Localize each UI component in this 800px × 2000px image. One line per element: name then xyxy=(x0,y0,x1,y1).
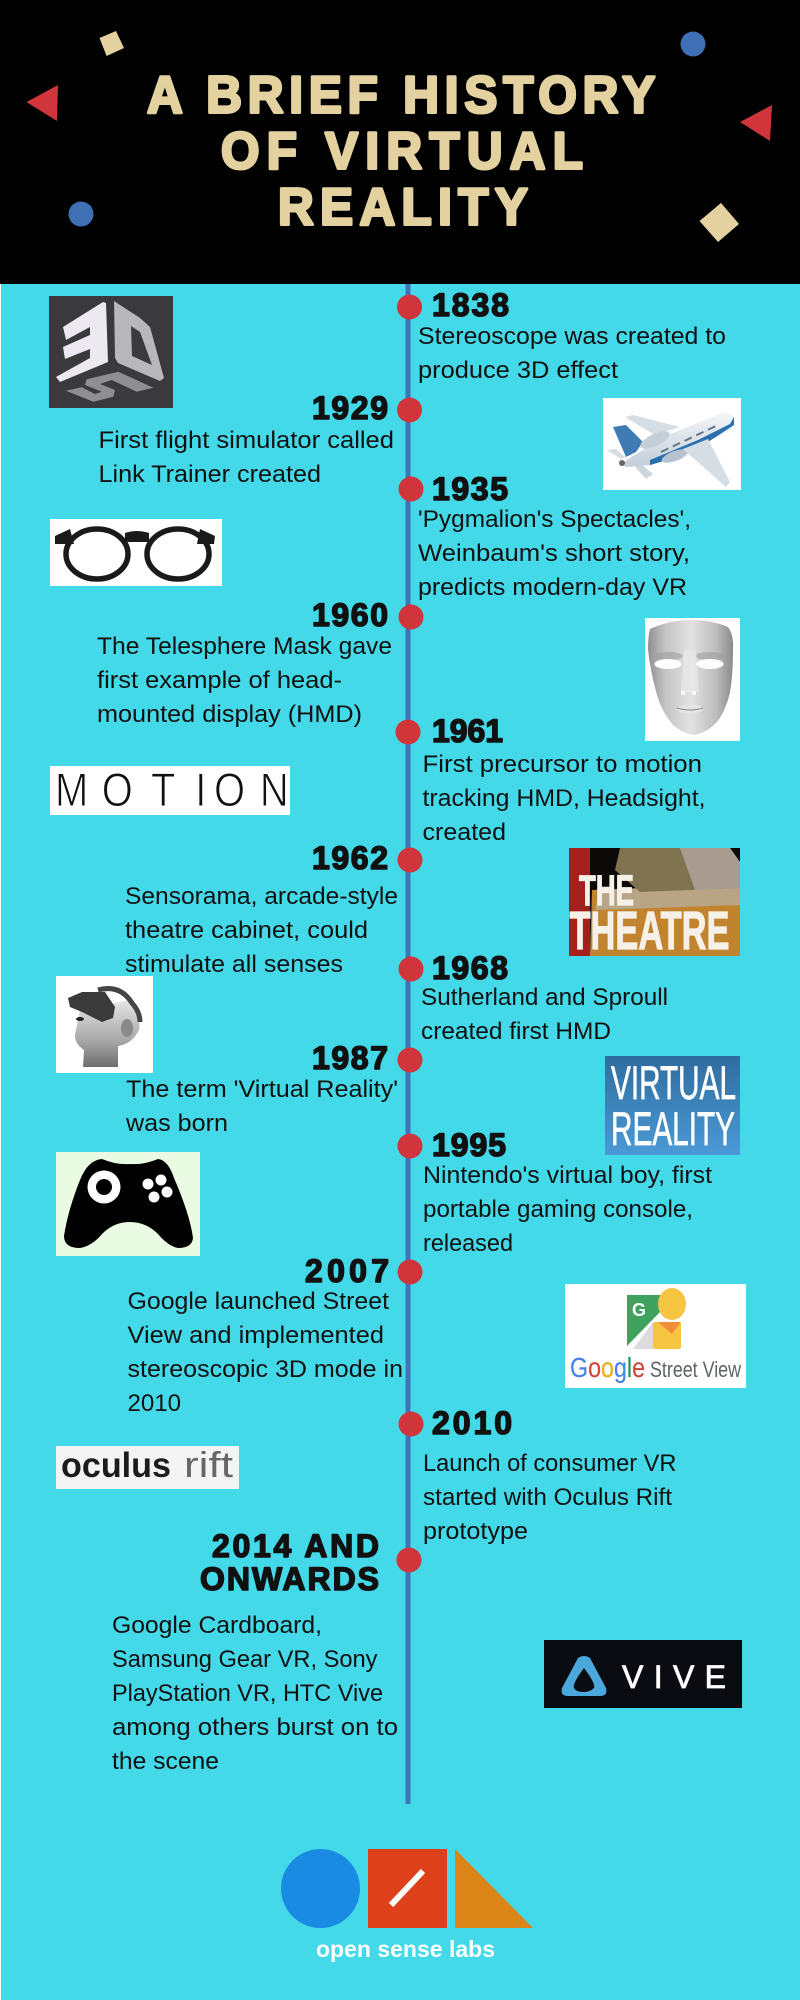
title: A BRIEF HISTORY xyxy=(147,65,655,124)
event: 1935: Weinbaum's short story, xyxy=(418,540,690,567)
event: 1968: 1968 xyxy=(432,950,508,986)
event: 2007: 2007 xyxy=(305,1253,389,1289)
event: 2014 and onwards: 2014 AND xyxy=(212,1528,379,1564)
event: 1987: The term 'Virtual Reality' xyxy=(126,1076,398,1103)
event: 2010 xyxy=(398,1405,676,1545)
title: REALITY xyxy=(278,177,528,236)
confetti shapes xyxy=(26,31,772,242)
image: oculus rift wordmark xyxy=(56,1444,239,1489)
event: 1838: Stereoscope was created to xyxy=(418,323,726,350)
event: 1960: 1960 xyxy=(312,597,388,633)
image: mask xyxy=(645,618,740,741)
event: 1935: predicts modern-day VR xyxy=(418,574,687,601)
image: virtual reality sign xyxy=(605,1056,740,1155)
image: VR headset user xyxy=(56,976,153,1073)
image: motion wordmark: MOTION xyxy=(55,765,289,817)
image: Google Street View: Street View xyxy=(650,1357,741,1382)
event: 1961: First precursor to motion xyxy=(422,751,702,778)
event: 1968: created first HMD xyxy=(421,1018,611,1045)
event: 2014 and onwards: Samsung Gear VR, Sony xyxy=(112,1646,378,1673)
event: 2007: stereoscopic 3D mode in xyxy=(128,1356,403,1383)
event: 2007: Google launched Street xyxy=(128,1288,389,1315)
image: glasses xyxy=(50,519,222,586)
event: 1838: 1838 xyxy=(432,287,509,323)
image: Google Street View xyxy=(565,1284,746,1388)
event: 2007 xyxy=(128,1253,422,1417)
event: 2014 and onwards: the scene xyxy=(112,1748,219,1775)
image: theatre: THE xyxy=(579,867,634,915)
event: 2007: View and implemented xyxy=(128,1322,384,1349)
image: Google Street View: Google xyxy=(570,1352,645,1383)
event: 1995: 1995 xyxy=(432,1127,506,1163)
event: 1960: first example of head- xyxy=(97,667,342,694)
header panel xyxy=(0,0,800,284)
event: 1995: Nintendo's virtual boy, first xyxy=(423,1162,712,1189)
event: 1960: The Telesphere Mask gave xyxy=(97,633,392,660)
event: 2014 and onwards xyxy=(112,1528,422,1775)
timeline vertical line xyxy=(406,284,410,1804)
logo: open sense labs xyxy=(281,1849,533,1962)
event: 1962: Sensorama, arcade-style xyxy=(125,883,398,910)
event: 1995: released xyxy=(423,1230,513,1257)
image: Google Street View: G xyxy=(632,1300,646,1320)
event: 1987: was born xyxy=(125,1110,228,1137)
event: 1968: Sutherland and Sproull xyxy=(421,984,668,1011)
event: 1929: Link Trainer created xyxy=(98,461,321,488)
image: Vive logo xyxy=(544,1640,742,1708)
event: 1962: 1962 xyxy=(312,840,388,876)
event: 1838: produce 3D effect xyxy=(418,357,618,384)
event: 1987: 1987 xyxy=(312,1040,388,1076)
event: 1961: 1961 xyxy=(432,713,503,749)
event: 1960: mounted display (HMD) xyxy=(97,701,362,728)
event: 1995: portable gaming console, xyxy=(423,1196,693,1223)
event: 2014 and onwards: among others burst on to xyxy=(112,1714,398,1741)
title: OF VIRTUAL xyxy=(221,121,583,180)
event: 1935 xyxy=(398,471,691,601)
event: 2007: 2010 xyxy=(128,1390,181,1417)
image: theatre xyxy=(569,848,740,961)
event: 2010: started with Oculus Rift xyxy=(423,1484,672,1511)
event: 1929 xyxy=(98,390,422,488)
image: oculus rift wordmark: rift xyxy=(184,1444,233,1485)
event: 1935: 1935 xyxy=(432,471,508,507)
title xyxy=(147,65,655,236)
event: 1962 xyxy=(125,840,422,978)
event: 1929: First flight simulator called xyxy=(98,427,394,454)
logo: open sense labs: open sense labs xyxy=(316,1936,495,1962)
image: Vive logo: VIVE xyxy=(622,1659,726,1695)
event: 1962: theatre cabinet, could xyxy=(125,917,368,944)
event: 2014 and onwards: PlayStation VR, HTC Vive xyxy=(112,1680,383,1707)
event: 2014 and onwards: ONWARDS xyxy=(200,1561,379,1597)
event: 1929: 1929 xyxy=(312,390,388,426)
image: oculus rift wordmark: oculus xyxy=(61,1446,171,1485)
event: 2010: prototype xyxy=(423,1518,528,1545)
event: 1962: stimulate all senses xyxy=(125,951,343,978)
event: 1987 xyxy=(125,1040,423,1137)
image: airplane xyxy=(603,398,741,490)
event: 1960 xyxy=(97,597,424,728)
image: 3D logo xyxy=(49,296,173,408)
event: 1961 xyxy=(396,713,706,846)
event: 1961: created xyxy=(422,819,506,846)
event: 2010: 2010 xyxy=(432,1405,512,1441)
event: 2010: Launch of consumer VR xyxy=(423,1450,676,1477)
event: 2014 and onwards: Google Cardboard, xyxy=(112,1612,322,1639)
event: 1995 xyxy=(398,1127,712,1257)
event: 1961: tracking HMD, Headsight, xyxy=(422,785,706,812)
event: 1968 xyxy=(398,950,668,1045)
event: 1838 xyxy=(397,287,726,384)
image: game controller xyxy=(56,1152,200,1256)
event: 1935: 'Pygmalion's Spectacles', xyxy=(418,506,691,533)
